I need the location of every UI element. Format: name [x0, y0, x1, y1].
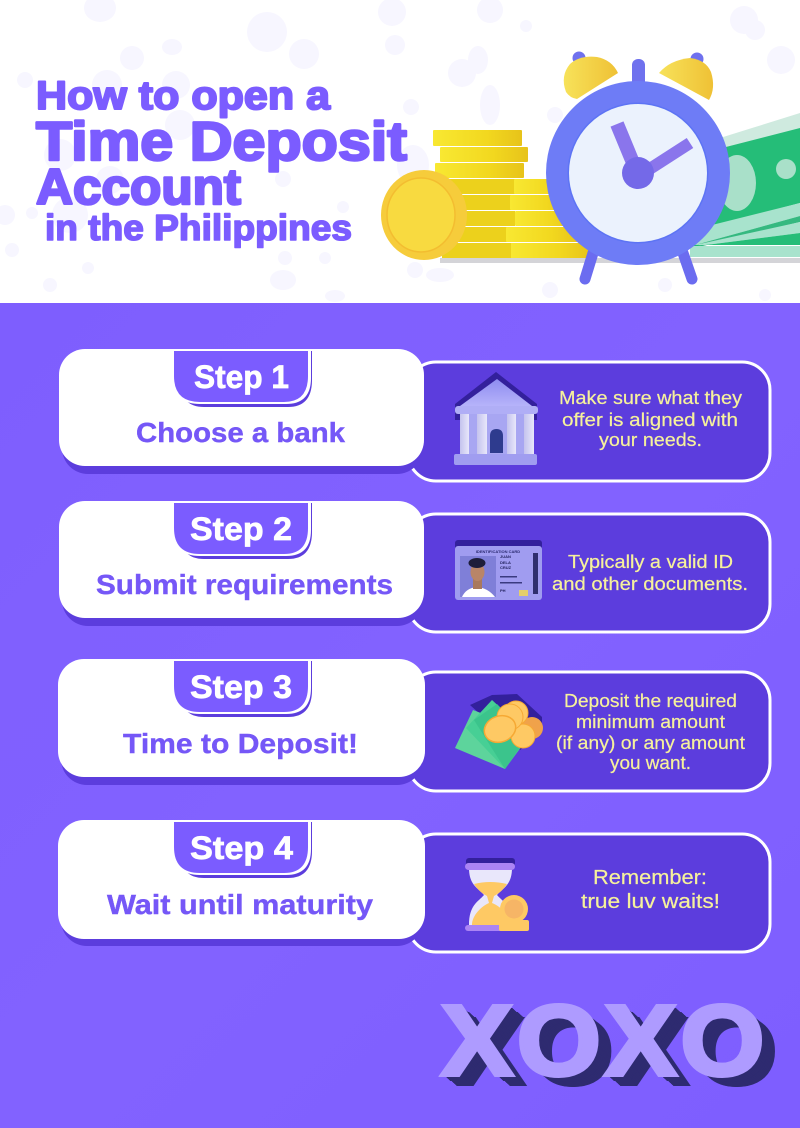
card: step 3 heading: [58, 659, 425, 785]
icon: single coin: [381, 170, 467, 260]
description: step 3: (if any) or any amount: [556, 733, 745, 753]
icon: hourglass with coin: [465, 858, 529, 931]
description: step 3: minimum amount: [576, 712, 725, 732]
description: step 2: [552, 552, 748, 594]
icon: bank: [454, 372, 538, 465]
title: in the Philippines: [45, 207, 352, 248]
card: step 4 heading: Step 4: [190, 830, 293, 866]
card: step 2 heading: Step 2: [190, 511, 292, 547]
panel: step 1 note: [408, 362, 770, 481]
card: step 2 heading: Submit requirements: [96, 569, 393, 600]
title: How to open a: [36, 74, 331, 118]
icon: ID card: CRUZ: [500, 565, 512, 570]
description: step 2: and other documents.: [552, 574, 748, 594]
card: step 2 heading: [59, 501, 424, 626]
description: step 4: [581, 867, 720, 913]
XOXO sign-off: XOXO: [441, 985, 768, 1097]
illustration: coins, alarm clock and cash: [381, 52, 800, 279]
title: [36, 74, 407, 248]
description: step 3: you want.: [610, 753, 691, 773]
icon: ID card: DELA: [500, 560, 511, 565]
description: step 2: Typically a valid ID: [568, 552, 733, 572]
icon: cash and coins: [455, 694, 543, 769]
step 4 row: [58, 820, 770, 952]
card: step 3 heading: Step 3: [190, 669, 292, 705]
icon: banknotes: [440, 113, 800, 263]
description: step 1: Make sure what they: [559, 388, 742, 408]
icon: ID card: PH: [500, 588, 506, 593]
icon: ID card: IDENTIFICATION CARD: [476, 549, 520, 554]
step 2 row: [59, 501, 770, 632]
title: Account: [36, 159, 241, 215]
step 3 row: [58, 659, 770, 791]
icon: alarm clock: [546, 52, 730, 279]
description: step 1: offer is aligned with: [562, 410, 738, 430]
card: step 1 heading: Choose a bank: [136, 417, 345, 448]
title: Time Deposit: [36, 110, 407, 172]
description: step 1: [559, 388, 742, 450]
card: step 4 heading: Wait until maturity: [107, 889, 373, 920]
icon: ID card: JUAN: [500, 554, 511, 559]
panel: step 2 note: [408, 514, 770, 632]
background panel: [0, 303, 800, 1128]
description: step 3: Deposit the required: [564, 691, 737, 711]
description: step 4: Remember:: [593, 867, 707, 889]
description: step 4: true luv waits!: [581, 891, 720, 913]
description: step 1: your needs.: [599, 430, 702, 450]
panel: step 4 note: [408, 834, 770, 952]
step 1 row: [59, 349, 770, 481]
icon: coin stacks: [433, 130, 591, 258]
card: step 3 heading: Time to Deposit!: [123, 728, 358, 759]
description: step 3: [556, 691, 745, 773]
card: step 1 heading: [59, 349, 424, 474]
panel: step 3 note: [408, 672, 770, 791]
card: step 1 heading: Step 1: [194, 359, 289, 395]
icon: ID card: [455, 540, 542, 600]
card: step 4 heading: [58, 820, 425, 946]
